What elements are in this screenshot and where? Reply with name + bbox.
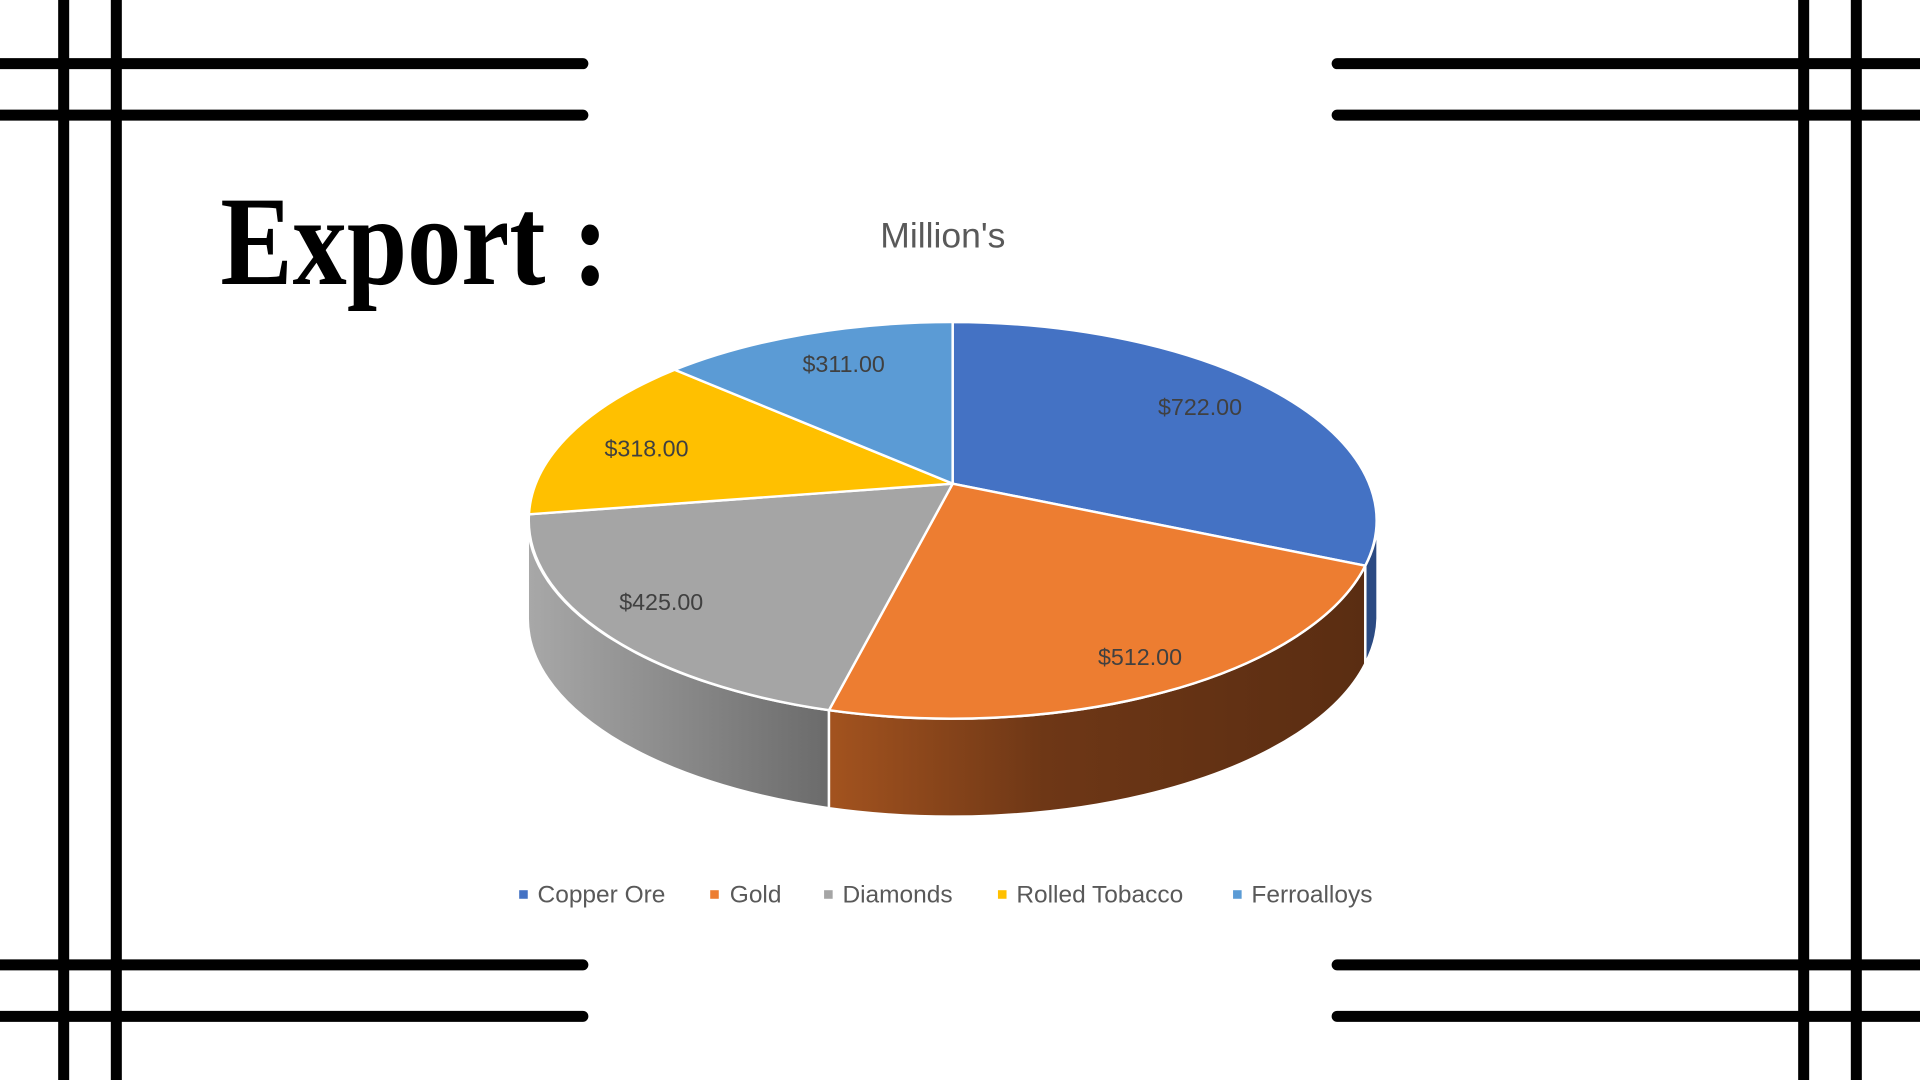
legend (519, 881, 1372, 908)
legend: Diamonds (842, 881, 953, 908)
frame: right border lines (1337, 0, 1920, 1080)
legend: Ferroalloys (1251, 881, 1372, 908)
legend: Copper Ore (538, 881, 665, 908)
data labels: $722.00 (1158, 394, 1242, 420)
3D pie chart (528, 322, 1378, 817)
title: Export : (220, 171, 609, 312)
data labels: $311.00 (803, 351, 885, 377)
frame: left border lines (0, 0, 583, 1080)
chart title: Million's (880, 215, 1005, 255)
data labels: $512.00 (1098, 644, 1182, 670)
legend: Rolled Tobacco (1016, 881, 1183, 908)
data labels: $425.00 (619, 589, 703, 615)
data labels (605, 351, 1242, 670)
data labels: $318.00 (605, 436, 689, 462)
legend: Gold (730, 881, 781, 908)
